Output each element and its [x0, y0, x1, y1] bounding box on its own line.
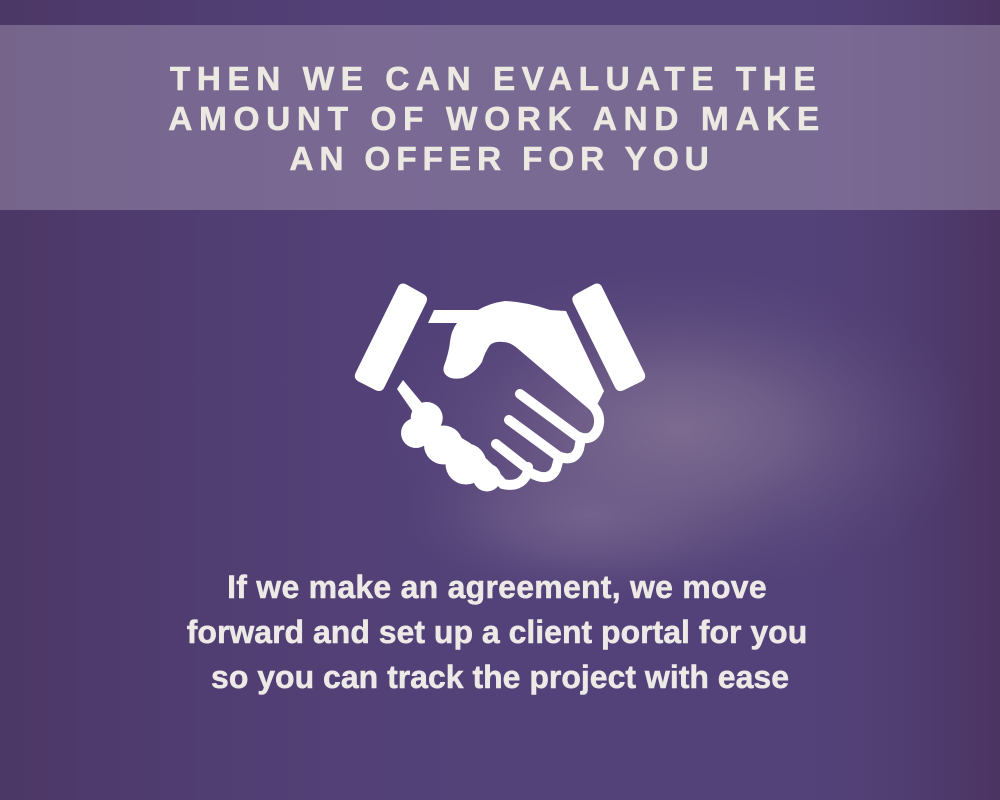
body text	[187, 569, 807, 695]
body text: so you can track the project with ease	[211, 659, 789, 695]
title: THEN WE CAN EVALUATE THE	[170, 61, 822, 98]
title: AN OFFER FOR YOU	[289, 141, 715, 178]
title	[168, 61, 826, 178]
fingers	[492, 394, 599, 485]
body text: If we make an agreement, we move	[227, 569, 767, 605]
body text: forward and set up a client portal for you	[187, 614, 807, 650]
translucent title band	[0, 25, 1000, 210]
icon: handshake	[354, 284, 646, 492]
left cuff	[355, 284, 427, 391]
left hand	[397, 380, 501, 492]
right cuff	[572, 284, 645, 391]
title: AMOUNT OF WORK AND MAKE	[168, 101, 826, 138]
right hand	[428, 301, 604, 410]
